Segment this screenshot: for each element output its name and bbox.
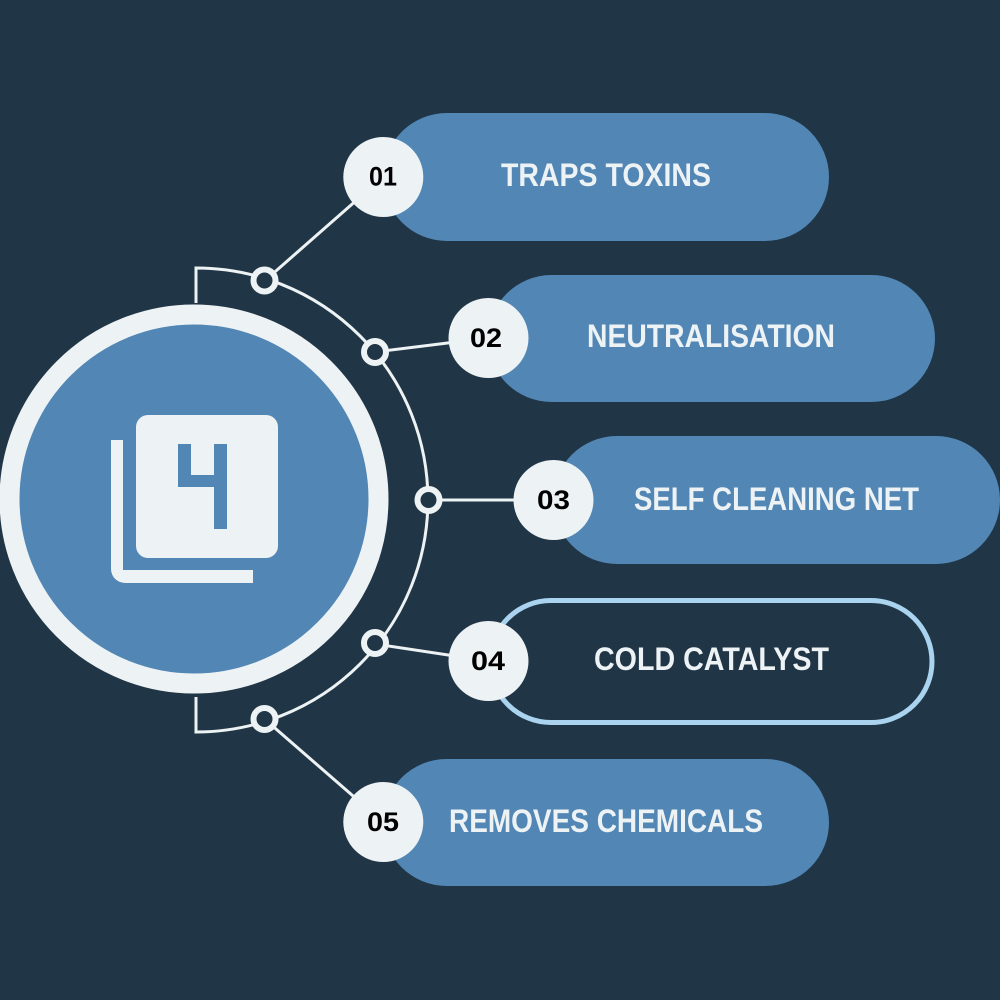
item 02: neutralisation: NEUTRALISATION: [587, 318, 835, 354]
item 03: self cleaning net: 03: [537, 485, 570, 515]
item 01: traps toxins: TRAPS TOXINS: [501, 157, 711, 193]
item 01: traps toxins: [343, 113, 829, 241]
central circle: [10, 314, 378, 684]
item 04: cold catalyst: [448, 600, 932, 722]
item 05: removes chemicals: [343, 759, 829, 886]
item 03: self cleaning net: [514, 436, 1000, 564]
item 03: self cleaning net: SELF CLEANING NET: [634, 481, 919, 517]
item 01: traps toxins: 01: [369, 162, 397, 192]
connector arc: [196, 177, 553, 822]
connector nodes: [254, 270, 440, 730]
item 02: neutralisation: 02: [470, 323, 502, 353]
item 04: cold catalyst: 04: [471, 646, 505, 676]
item 05: removes chemicals: 05: [367, 807, 399, 837]
item 04: cold catalyst: COLD CATALYST: [594, 641, 829, 677]
icon: layered square with number 4: [111, 415, 278, 583]
item 02: neutralisation: [448, 275, 935, 402]
item 05: removes chemicals: REMOVES CHEMICALS: [449, 803, 763, 839]
